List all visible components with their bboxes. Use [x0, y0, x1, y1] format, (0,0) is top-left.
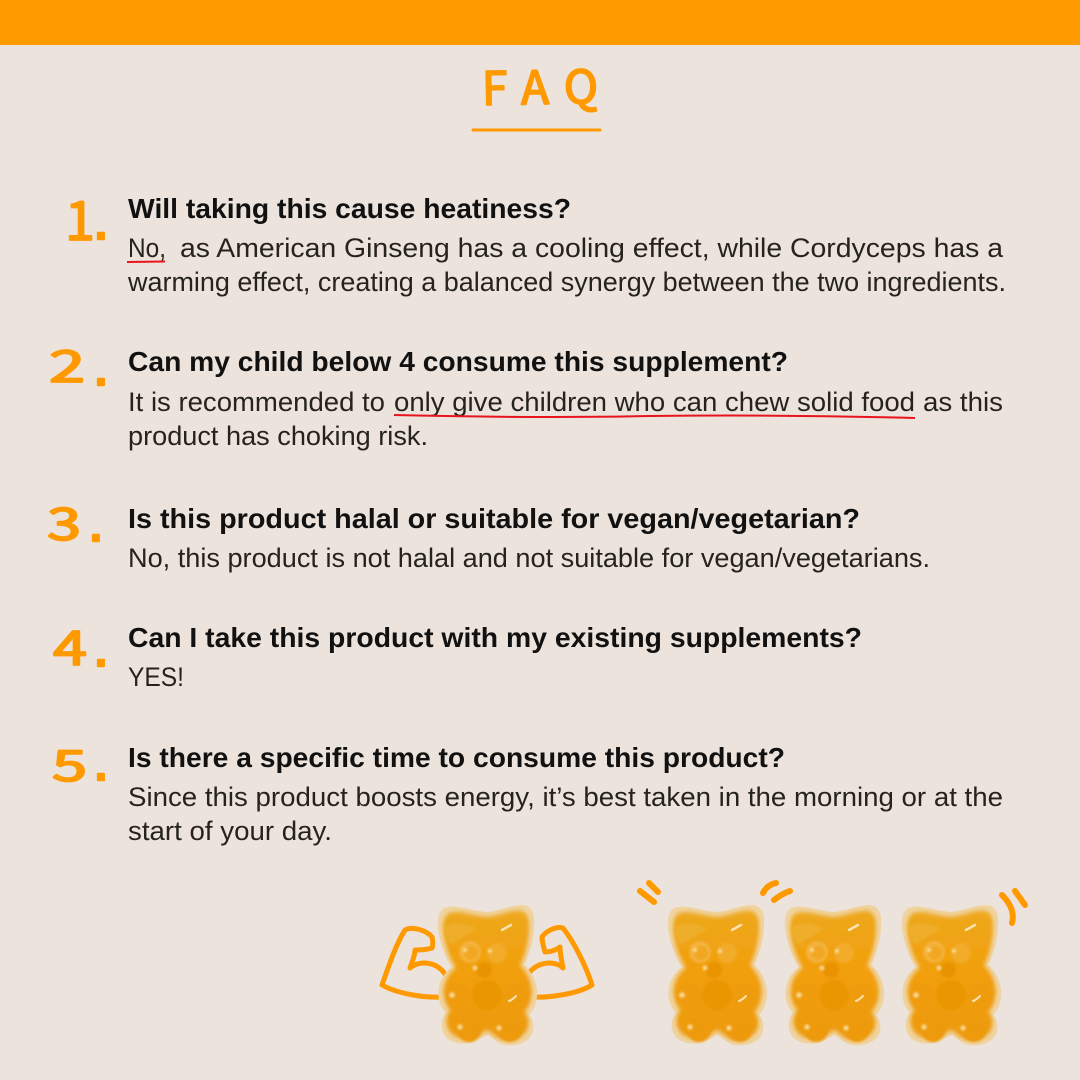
question 1 heading: Will taking this cause heatiness?	[128, 193, 571, 224]
red underline: No	[127, 260, 165, 263]
red underline: chew solid food	[394, 415, 915, 418]
question 5 heading: Is there a specific time to consume this product?	[128, 742, 785, 773]
answer 1: as American Ginseng has a cooling effect, while Cordyceps has a	[180, 233, 1004, 263]
gummy bear with muscle arms	[382, 905, 592, 1045]
number 3	[47, 488, 102, 553]
number 3: .	[90, 506, 102, 550]
icon: gummy bear 2	[785, 905, 884, 1045]
motion marks: right	[1002, 891, 1025, 923]
number 5: 5	[52, 732, 87, 794]
answer 2	[128, 387, 1003, 451]
icon: left flexed arm	[382, 928, 445, 997]
number 5: .	[95, 745, 107, 789]
number 2	[49, 331, 107, 395]
number 4: 4	[53, 609, 87, 679]
question 4	[53, 609, 862, 692]
question 3 heading: Is this product halal or suitable for vegan/vegetarian?	[128, 503, 860, 534]
number 2: 2	[49, 331, 85, 395]
answer 5	[128, 782, 1003, 846]
icon: right flexed arm	[528, 928, 592, 997]
icon: gummy bear 1	[668, 905, 767, 1045]
number 4: .	[95, 631, 107, 675]
answer 2: as this	[923, 387, 1003, 417]
answer 5: Since this product boosts energy, it’s best taken in the morning or at the	[128, 782, 1003, 812]
number 3: 3	[47, 488, 81, 553]
answer 5: start of your day.	[128, 816, 332, 846]
answer 1: warming effect, creating a balanced synergy between the two ingredients.	[127, 267, 1006, 297]
icon: gummy bear	[438, 905, 537, 1045]
question 4 heading: Can I take this product with my existing supplements?	[128, 622, 862, 653]
question 2	[49, 331, 1003, 451]
motion marks: left	[640, 883, 658, 902]
answer 1	[127, 233, 1006, 297]
answer 3: No, this product is not halal and not suitable for vegan/vegetarians.	[128, 543, 930, 573]
answer 2: product has choking risk.	[128, 421, 428, 451]
icon: gummy bear 3	[902, 905, 1001, 1045]
motion marks: middle	[763, 883, 790, 900]
answer 4: YES!	[128, 662, 184, 692]
three vibrating gummy bears	[640, 883, 1025, 1045]
number 1: 1	[65, 177, 95, 256]
number 5	[52, 732, 107, 794]
number 2: .	[95, 350, 107, 394]
number 1: .	[95, 204, 107, 248]
question 2 heading: Can my child below 4 consume this supplement?	[128, 346, 788, 377]
title: FAQ: FAQ	[481, 51, 599, 119]
number 4	[53, 609, 107, 679]
title underline	[473, 128, 600, 132]
question 1	[65, 177, 1006, 297]
answer 2: It is recommended to	[128, 387, 385, 417]
top orange bar	[0, 0, 1080, 45]
answer 1: No,	[128, 233, 166, 263]
question 5	[52, 732, 1003, 846]
question 3	[47, 488, 930, 573]
answer 2: only give children who can chew solid food	[394, 387, 915, 417]
